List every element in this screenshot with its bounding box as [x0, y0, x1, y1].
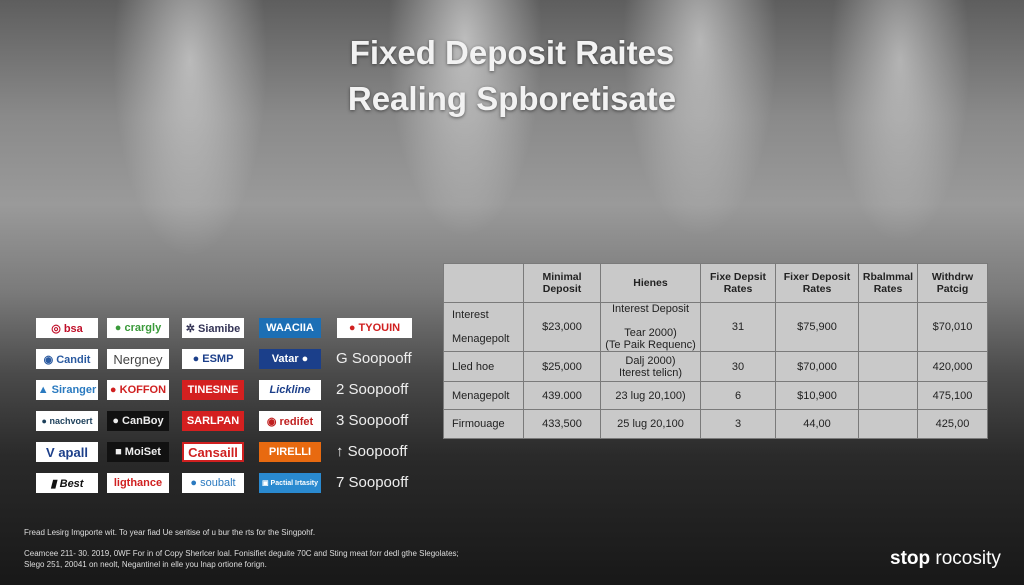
logo grid: 7 Soopooff [336, 474, 408, 491]
table: rates: $23,000 [542, 321, 582, 333]
table: rates: 420,000 [933, 360, 972, 372]
table: rates: Rates [874, 283, 902, 295]
table: rates: Menagepolt [452, 390, 510, 402]
logo grid [36, 318, 412, 493]
logo grid: ▲ Siranger [38, 384, 96, 396]
table: rates: Lled hoe [452, 360, 494, 372]
logo grid: 3 Soopooff [336, 412, 408, 429]
logo grid: V apall [46, 444, 88, 460]
logo grid: G Soopooff [336, 350, 412, 367]
table: rates [443, 263, 988, 439]
logo grid: ◎ bsa [51, 322, 83, 334]
footnote text: Fread Lesirg Imgporte wit. To year fiad Ue seritise of u bur the rts for the Singpohf. [24, 528, 315, 537]
table: rates: $25,000 [542, 360, 582, 372]
table: rates: Dalj 2000) [625, 354, 676, 366]
logo grid: PIRELLI [269, 446, 311, 458]
table: rates: Iterest telicn) [619, 366, 682, 378]
logo grid: WAACIIA [266, 322, 314, 334]
logo grid: ◉ Candit [44, 354, 90, 366]
table: rates: 3 [735, 418, 741, 430]
table: rates: 25 lug 20,100 [617, 418, 684, 430]
table: rates: Fixer Deposit [784, 271, 850, 283]
table: rates: Withdrw [932, 271, 973, 283]
disclaimer text [24, 549, 459, 569]
table: rates: Rbalmmal [863, 271, 913, 283]
table: rates: Firmouage [452, 418, 505, 430]
logo grid: ● TYOUIN [349, 322, 400, 334]
table: rates: 44,00 [803, 418, 831, 430]
table: rates: Patcig [937, 283, 968, 295]
logo grid: Nergney [113, 352, 163, 366]
logo grid: ■ MoiSet [115, 446, 161, 458]
logo grid: ▮ Best [51, 478, 83, 490]
table: rates: Hienes [633, 277, 668, 289]
table: rates: Interest Deposit [612, 303, 689, 315]
disclaimer text: Ceamcee 211- 30. 2019, 0WF For in of Copy Sherlcer loal. Fonisifiet deguite 70C and Sting meat forr dedl gthe Slegolates; [24, 549, 459, 558]
table: rates: 31 [732, 321, 744, 333]
table: rates: Rates [803, 283, 831, 295]
logo grid: ● KOFFON [110, 384, 166, 396]
logo grid: SARLPAN [187, 415, 239, 427]
table: rates: 439.000 [542, 390, 582, 402]
table: rates: Fixe Depsit [710, 271, 766, 283]
brand logo: stop rocosity [890, 548, 1001, 569]
logo grid: ▣ Pactial Irtasity [262, 480, 318, 487]
table: rates: 23 lug 20,100) [615, 390, 686, 402]
logo grid: ● nachvoert [42, 416, 92, 426]
table: rates: 425,00 [936, 418, 969, 430]
logo grid: ● CanBoy [112, 415, 164, 427]
table: rates: $75,900 [797, 321, 837, 333]
table: rates: (Te Paik Requenc) [605, 339, 696, 351]
table: rates: 6 [735, 390, 741, 402]
disclaimer text: Slego 251, 20041 on neolt, Negantinel in elle you lnap ortione forign. [24, 560, 267, 569]
table: rates: 433,500 [542, 418, 582, 430]
table: rates: Tear 2000) [624, 327, 677, 339]
table: rates: Minimal [542, 271, 582, 283]
subtitle: Realing Spboretisate [348, 80, 676, 117]
logo grid: ◉ redifet [267, 416, 313, 428]
table: rates: Deposit [543, 283, 581, 295]
logo grid: ● soubalt [190, 477, 236, 489]
logo grid: ✲ Siamibe [186, 322, 240, 334]
title: Fixed Deposit Raites [350, 34, 674, 71]
logo grid: ligthance [114, 477, 162, 489]
table: rates: $70,010 [933, 321, 972, 333]
table: rates: 30 [732, 360, 744, 372]
logo grid: Lickline [270, 384, 310, 396]
logo grid: ● ESMP [193, 353, 233, 365]
logo grid: ● crargly [115, 322, 161, 334]
logo grid: ↑ Soopooff [336, 443, 407, 460]
table: rates: Menagepolt [452, 333, 510, 345]
logo grid: Vatar ● [272, 353, 308, 365]
table: rates: Interest [452, 309, 489, 321]
table: rates: 475,100 [933, 390, 972, 402]
logo grid: Cansaill [188, 444, 238, 460]
table: rates: $10,900 [797, 390, 837, 402]
table: rates: Rates [724, 283, 752, 295]
logo grid: TINESINE [188, 384, 238, 396]
table: rates: $70,000 [797, 360, 837, 372]
logo grid: 2 Soopooff [336, 381, 408, 398]
